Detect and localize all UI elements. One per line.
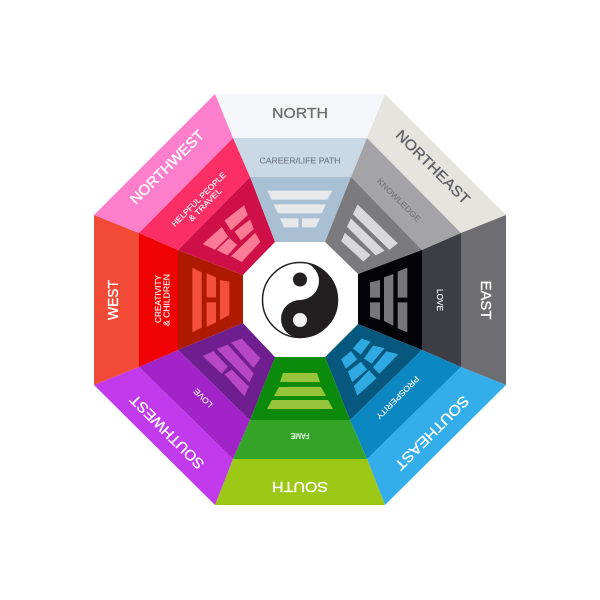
- label: Creativity and Children: [154, 274, 172, 326]
- heading: East: EAST: [477, 280, 493, 320]
- heading: Northwest: NORTHWEST: [127, 127, 208, 208]
- label: Love (east): LOVE: [435, 289, 444, 311]
- panel: northwest sector: [94, 94, 275, 275]
- heading: Southeast: SOUTHEAST: [391, 392, 472, 473]
- icon: east trigram: [370, 268, 407, 332]
- heading: Northeast: NORTHEAST: [392, 127, 473, 208]
- label: Helpful People and Travel: & TRAVEL: [187, 186, 224, 223]
- panel: east sector: [358, 215, 506, 385]
- panel: centre octagon: [243, 242, 358, 357]
- icon: west trigram: [192, 268, 229, 332]
- panel: west sector: [94, 215, 243, 385]
- label: Helpful People and Travel: HELPFUL PEOPLE: [170, 171, 228, 229]
- label: Creativity and Children: & CHILDREN: [162, 274, 171, 326]
- label: Creativity and Children: CREATIVITY: [154, 274, 163, 323]
- icon: southeast trigram: [342, 339, 398, 395]
- icon: northwest trigram: [203, 206, 260, 262]
- icon: northeast trigram: [342, 205, 397, 261]
- heading: South: SOUTH: [272, 478, 328, 494]
- panel: north sector: [215, 94, 385, 242]
- label: Love (southwest): LOVE: [192, 386, 215, 409]
- heading: North: NORTH: [272, 106, 328, 122]
- icon: yin yang: [262, 262, 338, 338]
- icon: north trigram: [267, 191, 332, 227]
- label: Fame: FAME: [290, 431, 310, 440]
- icon: southwest trigram: [203, 339, 260, 396]
- label: Career/Life Path: CAREER/LIFE PATH: [260, 156, 341, 165]
- panel: southeast sector: [325, 324, 506, 505]
- panel: south sector: [215, 357, 385, 505]
- panel: southwest sector: [94, 323, 275, 505]
- heading: Southwest: SOUTHWEST: [127, 391, 208, 472]
- label: Prosperity: PROSPERITY: [374, 374, 421, 421]
- label: Knowledge: KNOWLEDGE: [375, 177, 422, 224]
- heading: West: WEST: [106, 280, 122, 320]
- panel: northeast sector: [325, 94, 506, 274]
- icon: south trigram: [267, 373, 333, 409]
